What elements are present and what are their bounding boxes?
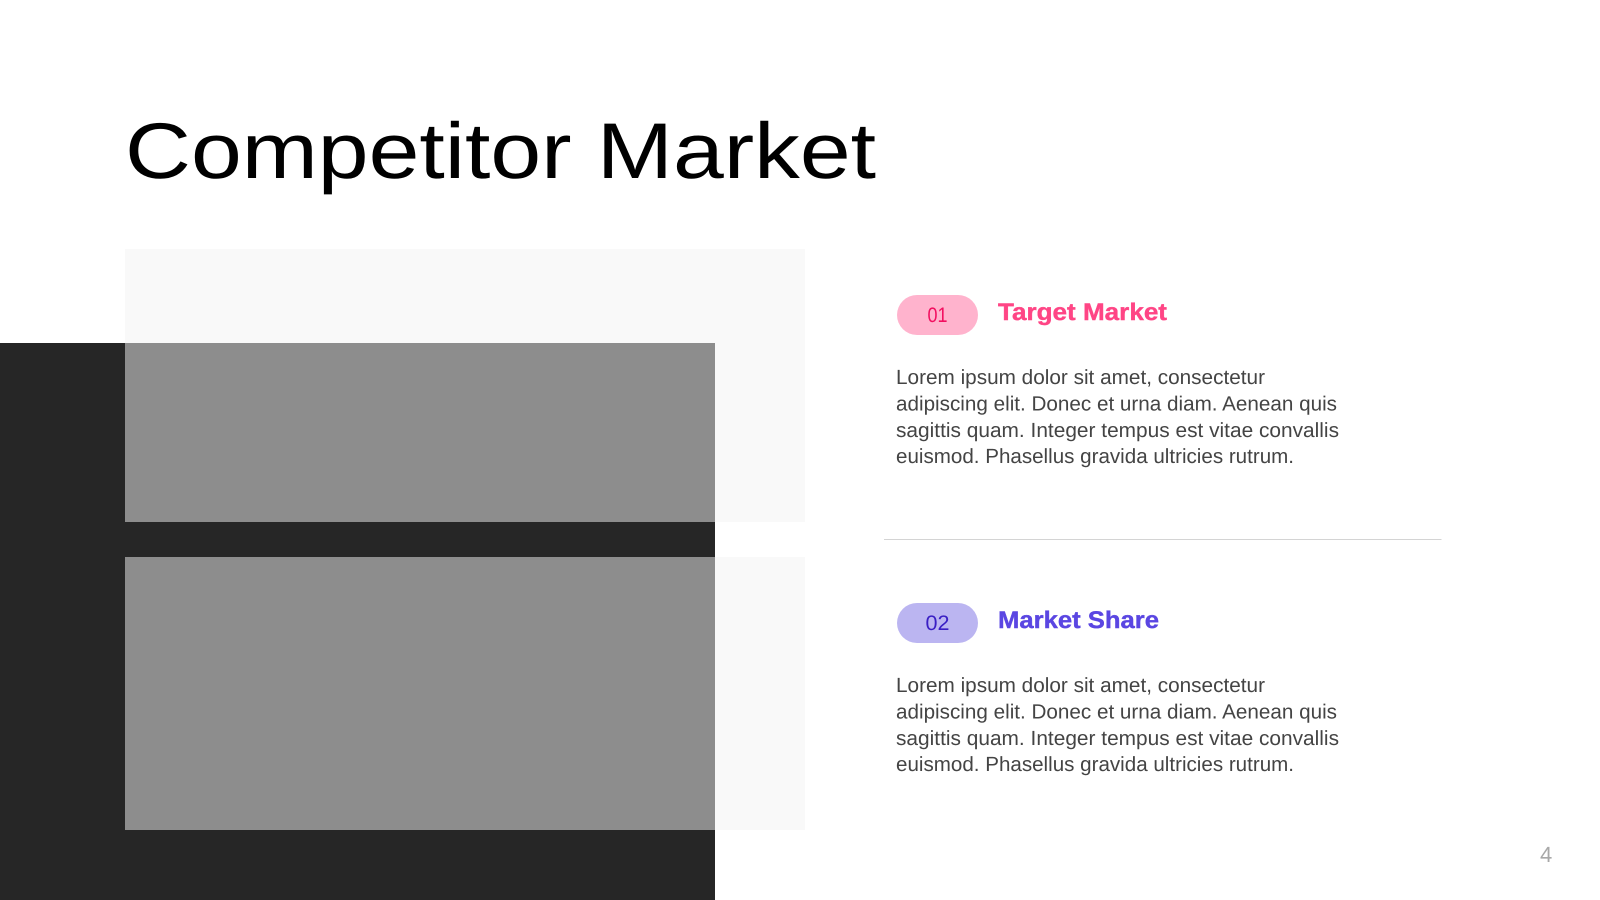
heading: Market Share: Market Share xyxy=(998,607,1159,634)
page number: 4 xyxy=(1540,842,1552,867)
body text 02: adipiscing elit. Donec et urna diam. Aenean quis xyxy=(896,700,1337,724)
image placeholder: bottom xyxy=(125,557,715,830)
badge 02 xyxy=(897,603,978,643)
badge 02: 02 xyxy=(926,612,950,635)
body text 01: sagittis quam. Integer tempus est vitae convallis xyxy=(896,419,1339,442)
section 01: Target Market xyxy=(896,295,1339,468)
body text 01: adipiscing elit. Donec et urna diam. Aenean quis xyxy=(896,392,1337,416)
body text 01: euismod. Phasellus gravida ultricies rutrum. xyxy=(896,445,1294,468)
dark backdrop block xyxy=(0,343,715,900)
section 02: Market Share xyxy=(896,603,1339,776)
light panel: top backing xyxy=(125,249,805,522)
image placeholder: top xyxy=(125,343,715,522)
body text 02: sagittis quam. Integer tempus est vitae convallis xyxy=(896,727,1339,750)
light panel: bottom backing xyxy=(715,557,805,830)
title: Competitor Market xyxy=(125,106,876,195)
badge 01 xyxy=(897,295,978,335)
body text 02: Lorem ipsum dolor sit amet, consectetur xyxy=(896,674,1265,697)
body text 02: euismod. Phasellus gravida ultricies rutrum. xyxy=(896,753,1294,776)
body text 01 xyxy=(896,366,1339,468)
body text 01: Lorem ipsum dolor sit amet, consectetur xyxy=(896,366,1265,389)
body text 02 xyxy=(896,674,1339,776)
heading: Target Market: Target Market xyxy=(998,299,1167,326)
badge 01: 01 xyxy=(928,304,948,327)
image panels group xyxy=(0,249,805,900)
